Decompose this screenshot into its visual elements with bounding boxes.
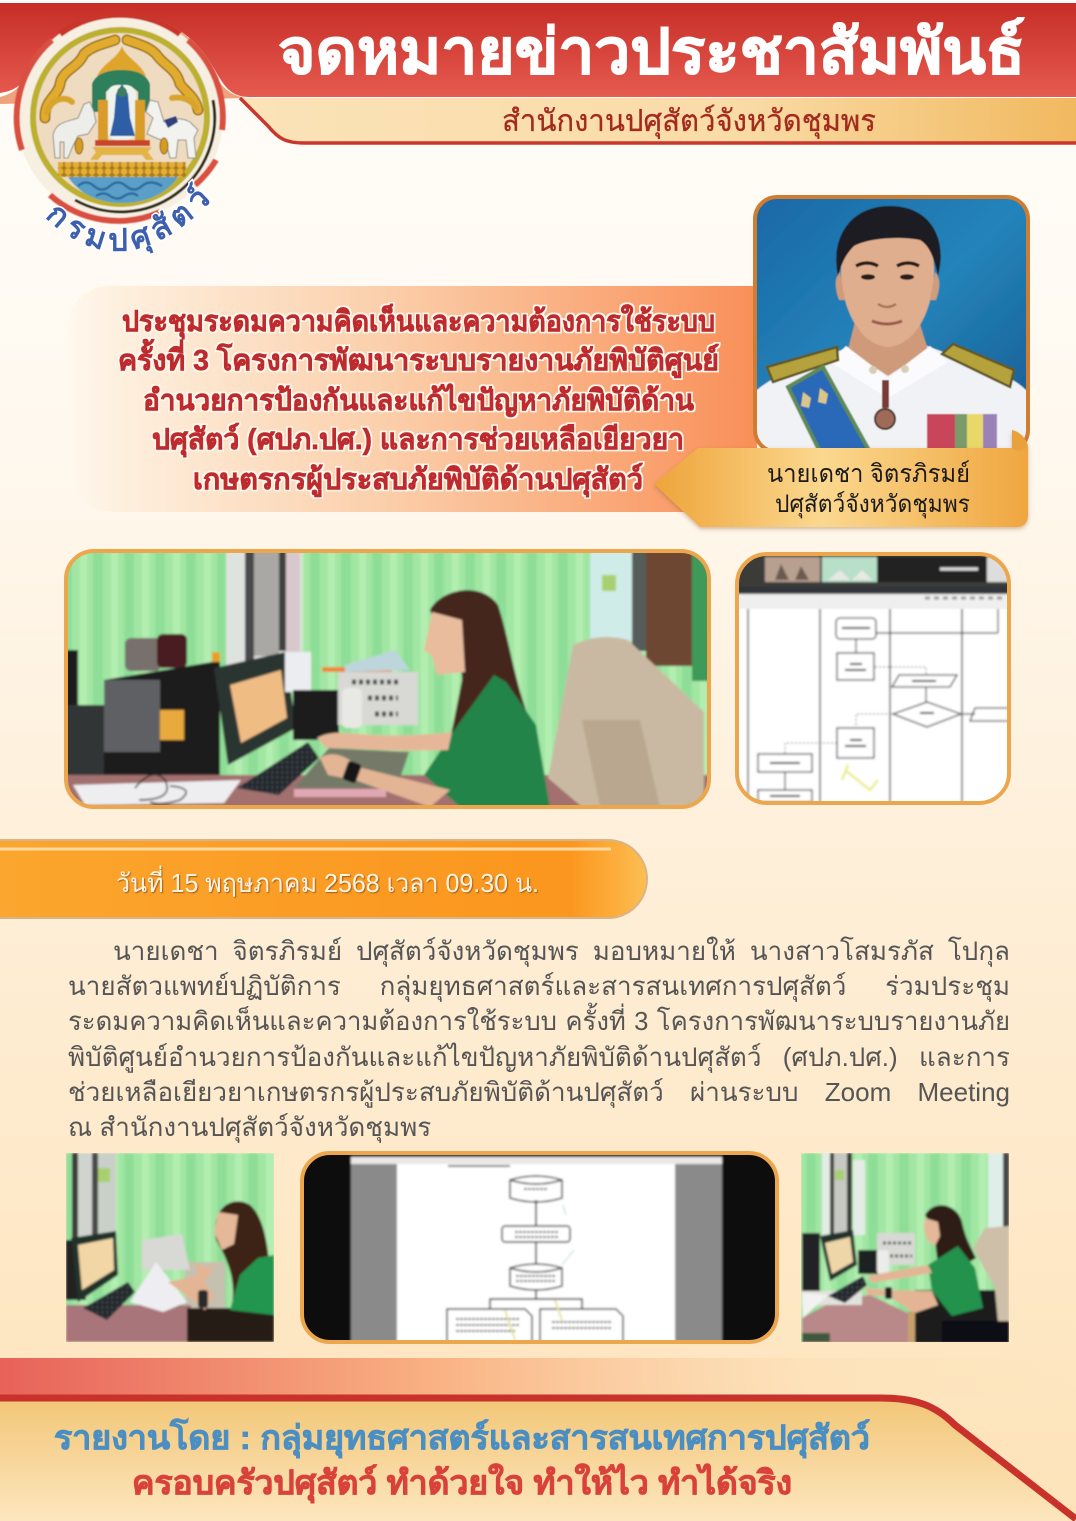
portrait: medal [875,380,895,429]
headline text: เกษตรกรผู้ประสบภัยพิบัติด้านปศุสัตว์ [193,462,643,497]
portrait: collar [830,346,948,398]
portrait: face [840,237,935,347]
main title: จดหมายข่าวประชาสัมพันธ์ [278,17,1025,87]
emblem: gold base band [58,162,186,177]
emblem caption on arc: กรมปศุสัตว์ [44,178,210,255]
headline text: อำนวยการป้องกันและแก้ไขปัญหาภัยพิบัติด้าน [143,383,694,418]
beige subtitle ribbon [240,98,1076,144]
footer gradient strip [0,1358,1076,1396]
header bump around the emblem [0,9,246,104]
portrait photo [755,197,1028,452]
icon: Department of Livestock Development emblem [17,14,223,221]
body paragraph: นายสัตวแพทย์ปฏิบัติการ กลุ่มยุทธศาสตร์และสารสนเทศการปศุสัตว์ ร่วมประชุม [68,971,1010,1001]
body paragraph: นายเดชา จิตรภิรมย์ ปศุสัตว์จังหวัดชุมพร มอบหมายให้ นางสาวโสมรภัส โปกุล [113,936,1010,966]
name: nai Decha: นายเดชา จิตรภิรมย์ [767,460,970,488]
portrait: blue sash [788,367,870,452]
photo: officer working at computer [66,551,709,807]
portrait: sash medals [801,388,828,408]
subtitle: office name: สำนักงานปศุสัตว์จังหวัดชุมพร [502,104,876,140]
emblem: shrine and deity [90,46,154,160]
portrait: neck [848,318,928,376]
footer red edge [0,1398,1076,1519]
footer: report credit: รายงานโดย : กลุ่มยุทธศาสตร์และสารสนเทศการปศุสัตว์ [54,1418,870,1459]
panel: headline background [68,286,757,512]
portrait: ears [836,272,939,300]
portrait: hair [836,206,941,276]
emblem: gold ring and beige field [30,27,210,207]
emblem: golden ornaments [45,40,198,118]
date bar [0,840,647,918]
portrait: buttons [869,365,909,374]
body paragraph: ณ สำนักงานปศุสัตว์จังหวัดชุมพร [68,1112,431,1142]
ribbon edge [240,98,1076,143]
emblem: dark shadow arc [75,100,215,212]
emblem: blue water [68,177,178,203]
photo: officer at workstation [801,1153,1009,1343]
date and time text: วันที่ 15 พฤษภาคม 2568 เวลา 09.30 น. [116,865,539,898]
body paragraph: ระดมความคิดเห็นและความต้องการใช้ระบบ ครั้งที่ 3 โครงการพัฒนาระบบรายงานภัย [68,1008,1010,1036]
body paragraph [68,936,1010,1143]
portrait: ribbon bars [927,414,997,450]
emblem: right white horse [146,100,198,158]
portrait: facial features [856,263,919,324]
body paragraph: พิบัติศูนย์อำนวยการป้องกันและแก้ไขปัญหาภัยพิบัติด้านปศุสัตว์ (ศปภ.ปศ.) และการ [68,1042,1010,1072]
photo: officer reading document [66,1153,274,1342]
footer: slogan: ครอบครัวปศุสัตว์ ทำด้วยใจ ทำให้ไว ทำได้จริง [132,1463,792,1504]
photo: flowchart document on screen [302,1153,777,1345]
headline text: ประชุมระดมความคิดเห็นและความต้องการใช้ระบบ [122,303,715,339]
photo: video meeting flowchart on screen [737,554,1010,803]
emblem: gold bells [75,138,168,154]
portrait: gold epaulettes [767,344,1014,387]
body paragraph: ช่วยเหลือเยียวยาเกษตรกรผู้ประสบภัยพิบัติด้านปศุสัตว์ ผ่านระบบ Zoom Meeting [68,1077,1010,1107]
headline text: ปศุสัตว์ (ศปภ.ปศ.) และการช่วยเหลือเยียวยา [152,422,684,457]
name ribbon [654,430,1028,527]
portrait: white uniform [755,345,1028,452]
emblem: horse saddle [164,116,178,128]
emblem: red outer arcs [17,15,223,221]
panel: footer [0,1398,1076,1521]
emblem: left white horse [53,102,96,158]
position title: ปศุสัตว์จังหวัดชุมพร [775,490,970,519]
header band [0,3,1076,144]
headline text [118,303,719,497]
headline text: ครั้งที่ 3 โครงการพัฒนาระบบรายงานภัยพิบัติศูนย์ [118,338,719,378]
red title band [0,3,1076,97]
